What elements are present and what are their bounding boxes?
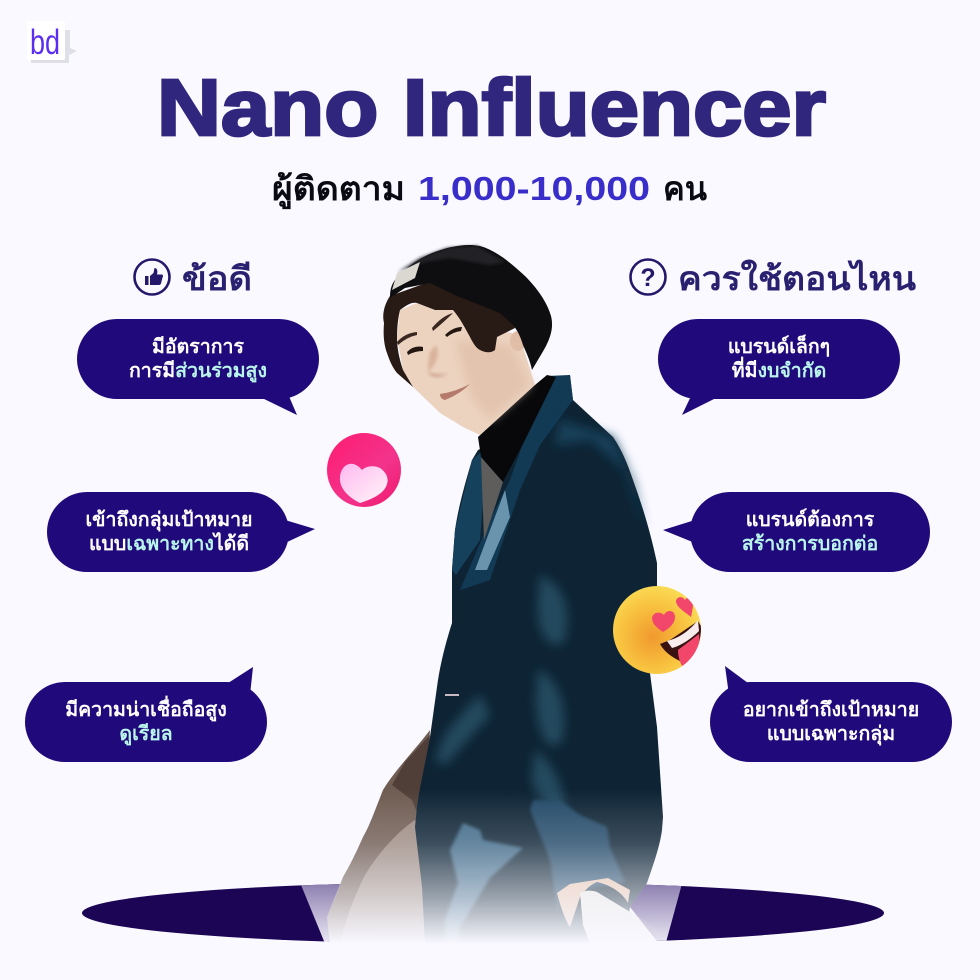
person silhouette backing xyxy=(327,728,663,945)
speech bubble: high engagement xyxy=(77,319,319,415)
coat body xyxy=(415,375,663,944)
speech bubble: niche targets xyxy=(710,666,952,762)
icon: heart badge xyxy=(327,433,401,507)
heading: pros: ข้อดี xyxy=(182,260,252,297)
speech bubble: specific targets xyxy=(47,492,315,572)
button mark xyxy=(445,694,459,696)
eyebrows xyxy=(397,313,453,345)
stick xyxy=(580,890,641,940)
subtitle: 1,000-10,000 xyxy=(418,170,650,207)
hat upper texture xyxy=(398,246,505,272)
coat collar xyxy=(460,375,573,590)
title: Nano Influencer xyxy=(157,63,826,152)
speech bubble: credibility: มีความน่าเชื่อถือสูง xyxy=(65,695,227,723)
speech bubble: credibility xyxy=(25,667,267,762)
speech bubble: high engagement: มีอัตราการ xyxy=(152,335,244,358)
speech bubble: word of mouth xyxy=(663,492,930,572)
speech bubble: small brands xyxy=(658,319,900,415)
floor ellipse xyxy=(82,882,884,944)
coat bottom light patch xyxy=(445,823,523,944)
coat shoulder tone xyxy=(555,420,645,530)
coat left panel xyxy=(452,447,487,575)
eyes xyxy=(407,327,462,355)
icon: question mark: ? xyxy=(640,264,656,292)
icon: thumbs up xyxy=(134,260,170,294)
subtitle: คน xyxy=(663,170,707,207)
heading: when to use: ควรใช้ตอนไหน xyxy=(678,259,916,297)
turtleneck xyxy=(478,375,556,482)
person xyxy=(327,245,665,944)
hat label xyxy=(392,262,420,290)
logo: bd xyxy=(30,23,60,62)
light beam xyxy=(301,884,682,942)
icon: question mark xyxy=(630,260,666,294)
hand xyxy=(557,878,630,927)
ear xyxy=(510,331,524,351)
sleeve highlights xyxy=(435,575,567,811)
speech bubble: small brands: แบรนด์เล็กๆ xyxy=(728,334,830,358)
hat xyxy=(390,245,552,370)
neck and face xyxy=(397,303,535,435)
sleeve cuff xyxy=(530,800,625,913)
speech bubble: credibility: ดูเรียล xyxy=(119,722,173,747)
trousers xyxy=(327,730,430,944)
speech bubble: word of mouth: สร้างการบอกต่อ xyxy=(742,533,878,555)
speech bubble: word of mouth: แบรนด์ต้องการ xyxy=(746,508,875,531)
speech bubble: niche targets: อยากเข้าถึงเป้าหมาย xyxy=(743,699,919,721)
icon: heart-eyes emoji xyxy=(613,586,701,674)
grey sweater xyxy=(481,457,503,540)
speech bubble: small brands: ที่มีงบจำกัด xyxy=(732,356,826,382)
speech bubble: specific targets: แบบเฉพาะทางได้ดี xyxy=(89,532,249,555)
subtitle: ผู้ติดตาม xyxy=(272,170,405,210)
speech bubble: niche targets: แบบเฉพาะกลุ่ม xyxy=(767,723,895,746)
lapel light strip xyxy=(475,490,510,570)
subtitle xyxy=(272,170,707,210)
speech bubble: specific targets: เข้าถึงกลุ่มเป้าหมาย xyxy=(86,509,252,532)
hair xyxy=(383,278,515,387)
face shading xyxy=(455,340,530,420)
mouth xyxy=(440,384,470,400)
speech bubble: high engagement: การมีส่วนร่วมสูง xyxy=(129,359,267,384)
